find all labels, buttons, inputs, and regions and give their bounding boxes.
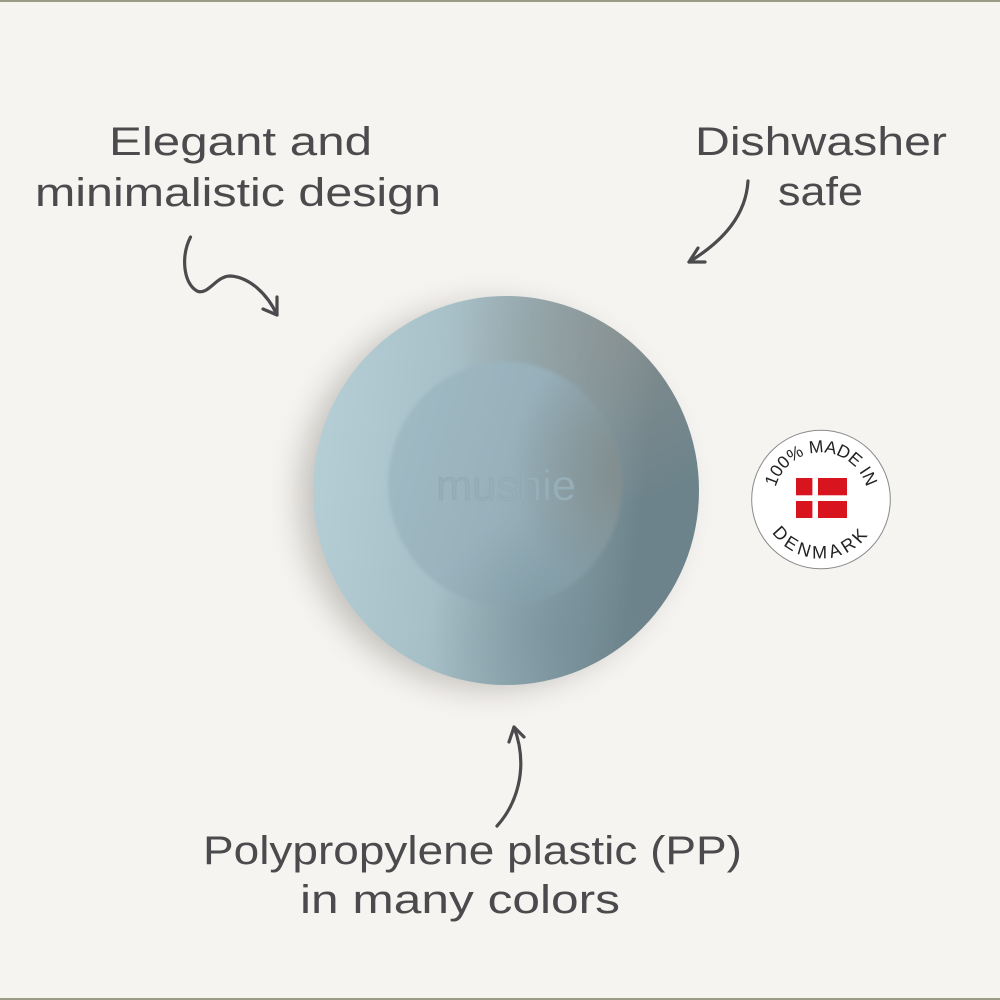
- heading: dishwasher safe: safe: [778, 170, 863, 214]
- badge: 100% made in Denmark: [751, 430, 891, 570]
- heading: polypropylene plastic: in many colors: [300, 878, 620, 922]
- embossed logo: mushie: [436, 462, 576, 510]
- heading: polypropylene plastic: [203, 829, 742, 922]
- arrow: to bowl from top left: [185, 237, 277, 315]
- heading: elegant and minimalistic design: Elegant and: [109, 120, 372, 164]
- badge top text: 100% MADE IN: [766, 440, 878, 486]
- top border: [0, 0, 1000, 2]
- bowl rim: [313, 296, 699, 685]
- bowl: [300, 280, 710, 700]
- heading: elegant and minimalistic design: minimalistic design: [35, 171, 441, 215]
- heading: elegant and minimalistic design: [35, 120, 441, 215]
- arrow: to bowl from top right: [689, 181, 748, 262]
- badge bottom text: DENMARK: [772, 526, 868, 558]
- heading: polypropylene plastic: Polypropylene plastic (PP): [203, 829, 742, 873]
- badge flag: [796, 478, 847, 518]
- bowl shadow: [300, 305, 680, 689]
- arrow: to bowl from bottom: [497, 727, 524, 826]
- bowl inner well: [388, 362, 622, 606]
- bottom border: [0, 998, 1000, 1000]
- heading: dishwasher safe: Dishwasher: [695, 120, 947, 164]
- heading: dishwasher safe: [695, 120, 947, 214]
